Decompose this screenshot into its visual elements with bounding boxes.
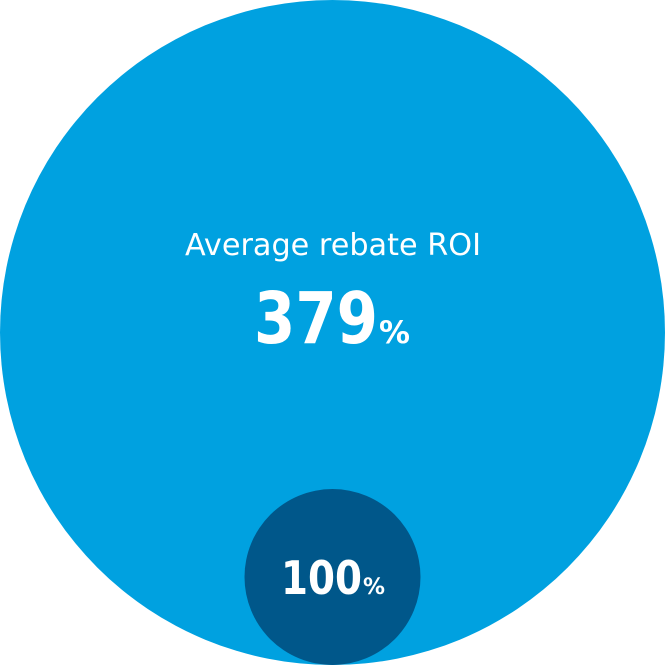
small circle: baseline <box>244 489 420 665</box>
value: 379%: % <box>379 315 410 351</box>
value: 379%: 379 <box>254 277 378 360</box>
value: 100%: % <box>363 575 385 600</box>
value: 100%: 100 <box>281 551 362 605</box>
label: Average rebate ROI: Average rebate ROI <box>185 228 481 263</box>
